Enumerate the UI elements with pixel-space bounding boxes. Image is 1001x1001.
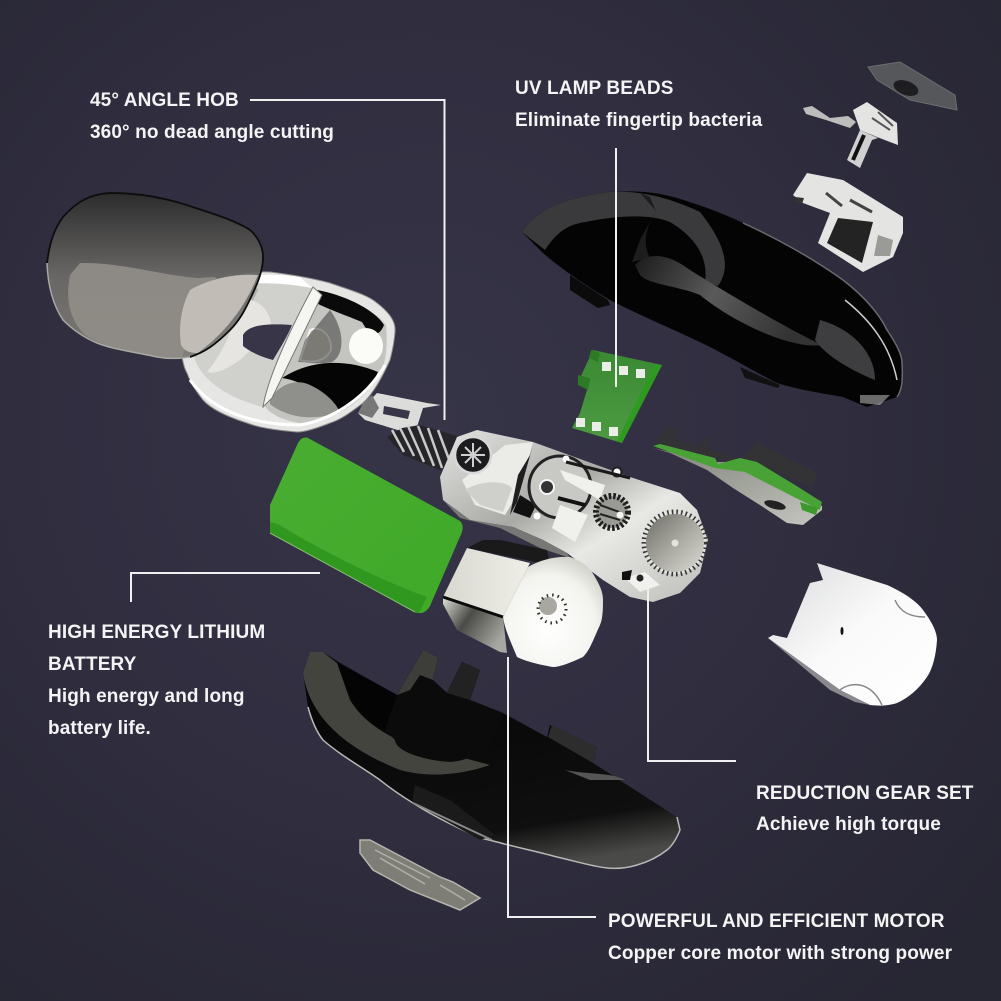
icon: chrome hob housing xyxy=(180,272,395,432)
text: motor: POWERFUL AND EFFICIENT MOTOR xyxy=(608,911,945,932)
icon: clear bottom part xyxy=(360,840,480,910)
callout line: angle hob xyxy=(250,100,444,420)
icon: bottom black shell xyxy=(303,650,680,868)
icon: white end cap xyxy=(768,563,937,706)
text: reduction gear set: REDUCTION GEAR SET xyxy=(756,783,974,804)
icon: top gasket xyxy=(868,62,957,110)
text: 45 degree angle hob xyxy=(90,90,334,143)
callout line: gear set xyxy=(648,575,736,761)
icon: gearbox chrome body xyxy=(440,430,708,602)
callout line: UV lamp xyxy=(615,148,617,387)
text: motor xyxy=(608,911,953,964)
icon: silver motor xyxy=(443,540,603,667)
callout line: motor xyxy=(508,657,596,917)
icon: top black shell xyxy=(522,191,902,407)
icon: green control board xyxy=(653,427,822,525)
text: reduction gear set: Achieve high torque xyxy=(756,814,941,835)
text: battery: battery life. xyxy=(48,718,151,739)
text: UV lamp beads: Eliminate fingertip bacteria xyxy=(515,110,763,131)
text: reduction gear set xyxy=(756,783,974,835)
icon: worm shaft and bracket xyxy=(358,393,460,470)
text: 45 degree angle hob: 360° no dead angle cutting xyxy=(90,122,334,143)
icon: chrome switch part xyxy=(803,102,898,168)
text: battery xyxy=(48,622,265,739)
text: motor: Copper core motor with strong power xyxy=(608,943,953,964)
callout line: battery xyxy=(131,573,320,602)
text: battery: BATTERY xyxy=(48,654,137,675)
text: UV lamp beads xyxy=(515,78,763,131)
text: battery: HIGH ENERGY LITHIUM xyxy=(48,622,265,643)
icon: green battery xyxy=(270,438,463,613)
text: UV lamp beads: UV LAMP BEADS xyxy=(515,78,674,99)
text: 45 degree angle hob: 45° ANGLE HOB xyxy=(90,90,239,111)
icon: chrome and dark bracket xyxy=(793,173,903,272)
text: battery: High energy and long xyxy=(48,686,245,707)
icon: UV lamp PCB xyxy=(572,350,662,443)
icon: transparent smoked cover xyxy=(47,193,263,358)
